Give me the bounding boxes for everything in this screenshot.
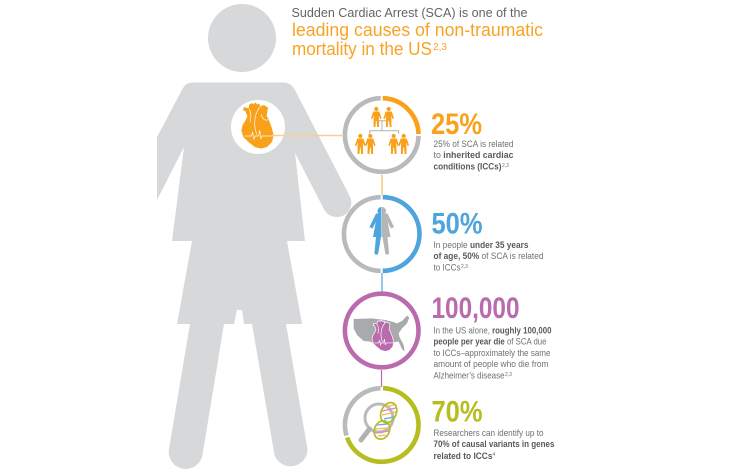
stat: 25% (431, 108, 514, 172)
ring: 25% orange (345, 98, 418, 172)
stat: 50%: In people under 35 years (434, 240, 528, 251)
icon: US map with heart (354, 316, 409, 352)
icon: heart on white chest circle (231, 100, 285, 154)
stat: 100,000: Alzheimer’s disease (434, 370, 504, 382)
stat: 25%: 25% (431, 108, 482, 141)
icon: half blue half grey person (370, 207, 394, 255)
stat: 100,000: In the US alone, roughly 100,000 (434, 326, 552, 336)
icon: family tree (355, 107, 409, 154)
ring: 70% green (345, 388, 419, 462)
stat: 70%: related to ICCs (434, 451, 492, 462)
stat: 70% (432, 396, 554, 462)
stat: 50%: of age, 50% of SCA is related (434, 251, 544, 262)
stat: 70%: Researchers can identify up to (434, 428, 544, 439)
title: 2,3 (433, 42, 447, 53)
stat: 50%: to ICCs (434, 262, 461, 274)
stat: 25%: conditions (ICCs) (434, 162, 502, 172)
connector: orange (381, 175, 383, 195)
connector: heart to first ring (272, 134, 342, 136)
icon: magnifier with DNA (361, 400, 400, 442)
stat: 100,000: people per year die of SCA due (434, 336, 546, 348)
stat: 50%: 2,3 (461, 264, 468, 270)
stat: 100,000: amount of people who die from (434, 359, 549, 370)
title: leading causes of non-traumatic (292, 20, 543, 40)
ring: 50% blue (344, 197, 419, 271)
title (292, 5, 543, 59)
stat: 70%: 70% (432, 396, 482, 428)
ring: 100,000 purple (345, 294, 419, 367)
stat: 25%: 2,3 (502, 163, 509, 169)
stat: 70%: 4 (492, 452, 496, 458)
stat: 100,000 (432, 292, 552, 382)
stat: 25%: 25% of SCA is related (434, 139, 514, 150)
connector: purple (380, 370, 382, 387)
title: Sudden Cardiac Arrest (SCA) is one of the (292, 5, 528, 20)
stat: 50%: 50% (432, 208, 482, 240)
silhouette: grey female figure (157, 4, 351, 469)
stat: 100,000: 100,000 (432, 292, 520, 325)
stat: 100,000: 2,3 (505, 372, 512, 378)
stat: 50% (432, 208, 544, 274)
connector: blue (381, 273, 383, 292)
stat: 70%: 70% of causal variants in genes (434, 439, 554, 450)
stat: 25%: to inherited cardiac (434, 150, 514, 161)
title: mortality in the US (292, 39, 432, 59)
stat: 100,000: to ICCs–approximately the same (434, 348, 550, 359)
